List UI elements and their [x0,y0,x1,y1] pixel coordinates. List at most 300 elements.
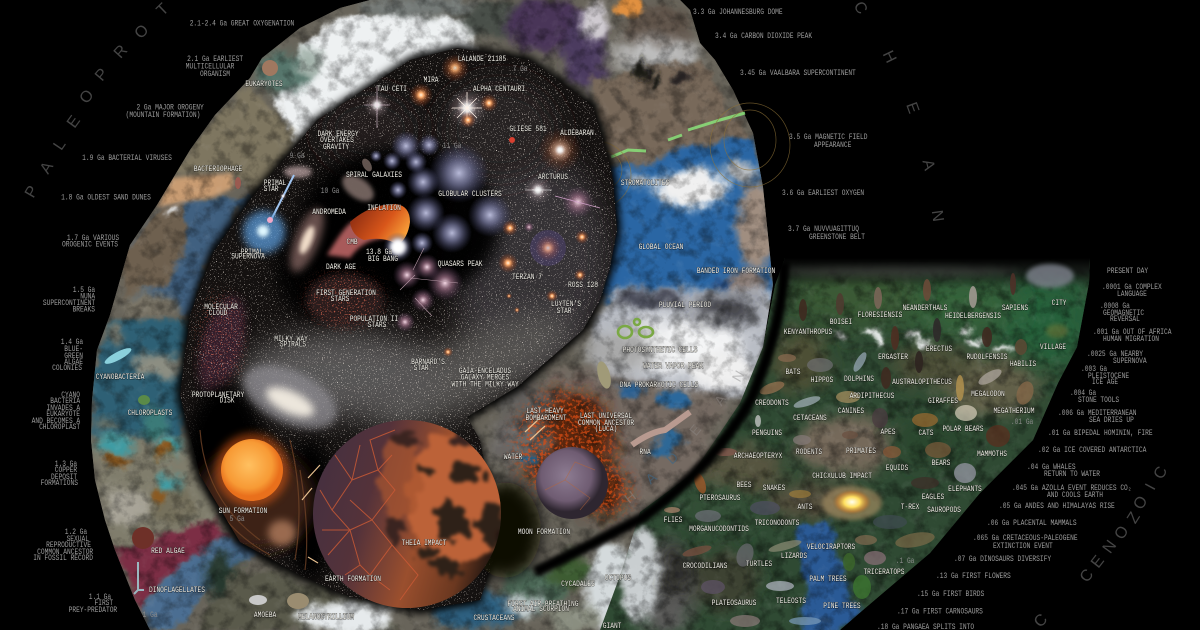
inner labels: species of the fan: TRICERATOPS [863,569,905,577]
inner labels: cosmos: PRIMAL [264,180,286,188]
inner labels: species of the fan: BEARS [932,460,950,468]
inner labels: land band: LAST HEAVY [526,408,564,416]
inner labels: cosmos: CLOUD [209,310,227,318]
era title: Paleoproterozoic: P [22,183,42,201]
inner labels: cosmos: FIRST GENERATION [316,290,376,298]
era title: Archean [850,0,946,223]
inner labels: species of the fan: RUDOLFENSIS [966,354,1008,362]
inner labels: species of the fan: ARCHAEOPTERYX [734,453,783,461]
aurora stripes [611,113,745,157]
brown tidal flats [540,370,730,512]
timeline labels: top right [693,9,867,242]
inner labels: species of the fan: MORGANUCODONTIDS [689,526,749,534]
globular clusters [370,131,512,254]
inner labels: land band: EUKARYOTES [245,81,283,89]
inner labels: cosmos: WITH THE MILKY WAY [451,381,519,390]
first generation stars field [307,274,383,326]
timeline labels: right side: PLEISTOCENE [1088,373,1129,381]
timeline labels: right side: .02 Ga ICE COVERED ANTARCTICA [1038,447,1147,455]
timeline labels: left side: 1.8 Ga OLDEST SAND DUNES [61,194,151,203]
era title: Paleoproterozoic [22,0,173,201]
inner labels: land band: MELANOCYRILLIUM [298,614,354,622]
inner labels: cosmos: QUASARS PEAK [438,261,483,269]
inner labels: species of the fan: BEES [737,482,751,490]
inner labels: cosmos: DARK ENERGY [318,131,359,139]
era title: Cenozoic: C [1077,566,1097,586]
inner labels: land band: CYANOBACTERIA [96,374,145,382]
inner labels: species of the fan: DOLPHINS [844,376,874,384]
black ring against fan [535,262,784,572]
timeline labels: right side: .0008 Ga [1100,303,1130,311]
inner labels: land band: COMMON ANCESTOR [578,420,635,428]
inner labels: species of the fan: TELEOSTS [776,598,806,606]
timeline labels: right side: .001 Ga OUT OF AFRICA [1093,329,1172,337]
inner labels: cosmos: INFLATION [367,205,401,213]
inner labels: cosmos: DARK AGE [326,264,356,272]
inner labels: cosmos: ALPHA CENTAURI [473,86,525,94]
inner labels: species of the fan: PTEROSAURUS [699,495,741,503]
inner labels: land band: 1 Ga [143,612,158,620]
era title: Hadean: H [621,488,639,506]
inner labels: species of the fan: ERGASTER [878,354,909,362]
inner labels: species of the fan: PLATEOSAURUS [712,600,756,608]
timeline labels: left side: 1.4 Ga [61,339,84,347]
timeline labels: left side: CHLOROPLAST [39,424,81,432]
inner labels: species of the fan: PRIMATES [846,448,876,456]
inner labels: species of the fan: HABILIS [1010,361,1036,369]
era title: Cenozoic [1031,464,1171,630]
era title: Cenozoic: C [1151,464,1171,482]
panel: cosmic spiral [170,40,630,620]
timeline labels: right side: .13 Ga FIRST FLOWERS [936,573,1011,581]
timeline labels: left side: REPRODUCTIVE [46,542,91,550]
dinoflagellate icon [134,562,144,594]
timeline labels: left side: GREEN [64,353,83,361]
inner labels: land band: THEIA IMPACT [402,540,447,548]
timeline labels: left side: DEPOSIT [51,474,78,482]
timeline labels: right side: .05 Ga ANDES AND HIMALAYAS RISE [999,503,1115,511]
inner labels: land band: BOMBARDMENT [526,415,567,423]
cyanobacteria icon [103,345,133,367]
timeline labels: left side: EUKARYOTE [46,411,80,419]
timeline labels: right side: STONE TOOLS [1078,397,1119,405]
named stars [364,54,600,357]
timeline labels: top right: 3.3 Ga JOHANNESBURG DOME [693,9,783,17]
timeline labels: left side: 1.5 Ga [73,287,96,295]
timeline labels: left side [32,20,294,615]
era title: Cenozoic: N [1100,537,1120,557]
inner labels: species of the fan: TURTLES [746,561,772,569]
inner labels: species of the fan: LIZARDS [781,553,807,561]
timeline labels: right side: ICE AGE [1092,379,1118,387]
inner labels: species of the fan: ANTS [798,504,812,512]
timeline labels: top right: 3.4 Ga CARBON DIOXIDE PEAK [715,33,813,41]
inner labels: species of the fan: ARDIPITHECUS [850,393,894,401]
inner labels: cosmos: STARS [331,296,349,304]
inner labels: species of the fan: CETACEANS [793,415,827,423]
chloroplast icon [138,395,150,405]
timeline labels: right side: .07 Ga DINOSAURS DIVERSIFY [954,556,1052,564]
inner labels: cosmos: PROTOPLANETARY [192,392,245,400]
timeline labels: left side: MULTICELLULAR [186,63,235,72]
inner labels: land band: WATER VAPOR PEAK [643,363,704,371]
inner labels: species of the fan: CREODONTS [755,400,789,408]
era title: Cenozoic: I [1142,481,1160,493]
inner labels: species of the fan: AUSTRALOPITHECUS [892,379,952,387]
timeline labels: right side: HUMAN MIGRATION [1103,336,1159,344]
inner labels: land band: RNA [639,449,651,457]
timeline labels: left side: AND BECOMES A [32,418,81,426]
inner labels: cosmos: LUYTEN'S [551,301,581,309]
era title: Cenozoic: O [1131,493,1151,513]
inner labels: species of the fan: HIPPOS [811,377,833,385]
inner labels: land band: CYCADALES [561,581,595,589]
inner labels: land band: CHLOROPLASTS [128,410,172,418]
timeline labels: left side: 1.7 Ga VARIOUS [67,235,119,243]
top fog fade [783,258,1090,286]
timeline labels: right side: SEA DRIES UP [1089,417,1134,425]
panel: Phanerozoic fan of life [590,258,1100,630]
inner labels: species of the fan: SNAKES [763,485,785,493]
inner labels: species of the fan: ELEPHANTS [948,486,982,494]
inner labels: species of the fan: PALM TREES [809,576,847,584]
era title: Archean: H [879,48,899,66]
lava speckle [515,391,615,499]
era title: Cenozoic: E [1088,553,1108,571]
inner labels: species of the fan: FLORESIENSIS [858,312,902,320]
global ocean [600,135,775,300]
timeline labels: left side: 2.1-2.4 Ga GREAT OXYGENATION [190,20,294,29]
meteor streaks [302,418,545,563]
pluvial clouds [590,290,775,400]
inner labels: species of the fan: SAUROPODS [927,507,961,515]
inner labels: land band: (LUCA) [595,426,617,434]
hominid figures [799,273,1027,389]
inner labels: species of the fan: EAGLES [922,494,944,502]
timeline labels: left side: INVADES A [47,405,81,413]
timeline labels: right side: LANGUAGE [1117,291,1147,299]
inner labels: cosmos: GLOBULAR CLUSTERS [438,191,502,199]
era title: Paleoproterozoic: R [111,42,131,62]
timeline labels: top right: 3.6 Ga EARLIEST OXYGEN [782,190,864,198]
inner labels: cosmos: STARS [368,322,386,330]
inner labels: cosmos: GRAVITY [323,144,350,152]
timeline labels: left side: 1.2 Ga [65,529,88,537]
Earth formation globe [313,420,541,608]
timeline labels: left side: (MOUNTAIN FORMATION) [126,112,200,120]
timeline labels: right side: EXTINCTION EVENT [993,543,1053,551]
timeline labels: left side: 1.9 Ga BACTERIAL VIRUSES [82,155,172,163]
left lands: mountains [172,85,300,197]
timeline labels: left side: BREAKS [73,306,95,315]
river [793,522,862,630]
inner labels: cosmos: SPIRAL GALAXIES [346,172,402,180]
inner labels: land band [96,81,775,630]
timeline labels: right side: .01 Ga BIPEDAL HOMININ, FIRE [1048,430,1153,438]
inner labels: cosmos: DISK [220,397,235,406]
era title: Hadean: A [711,391,730,408]
inner labels: species of the fan: MAMMOTHS [977,451,1007,459]
red algae icon [132,527,154,549]
inner labels: species of the fan: HEIDELBERGENSIS [945,313,1001,321]
inner labels: species of the fan: .1 Ga [896,558,915,566]
inner labels: land band: GLOBAL OCEAN [639,244,683,252]
snow peaks [832,326,1014,353]
era title: Paleoproterozoic: T [154,0,173,20]
inner labels: species of the fan: MEGALODON [971,391,1005,399]
Milky Way galaxy [234,352,346,442]
timeline labels: top right: 3.5 Ga MAGNETIC FIELD [789,134,867,142]
inner labels: cosmos: 10 Ga [321,188,340,196]
inner labels: cosmos: OVERTAKES [320,137,354,145]
inner labels: land band: DINOFLAGELLATES [149,587,205,595]
inner labels: cosmos: GLIESE 581 [509,126,547,134]
eukaryote icon [262,60,278,76]
timeline labels: right side: .0025 Ga NEARBY [1087,351,1144,359]
timeline labels: left side: BACTERIA [50,398,81,406]
Moon [536,447,608,519]
inner labels: land band: DNA PROKARYOTIC CELLS [620,382,698,390]
inner labels: species of the fan: CHICXULUB IMPACT [812,473,873,481]
era title: Hadean: N [729,368,747,384]
timeline labels: left side: OROGENIC EVENTS [62,241,118,250]
timeline labels: top right: GREENSTONE BELT [809,234,866,242]
inner labels: species of the fan: PINE TREES [823,603,861,611]
timeline labels: left side: ALGAE [64,359,83,367]
inner labels: species of the fan: VELOCIRAPTORS [807,544,855,552]
inner labels: species of the fan: BOISEI [830,319,852,327]
timeline labels: left side: SEXUAL [67,536,89,544]
inner labels: species of the fan: POLAR BEARS [942,426,984,434]
era title: Archean: E [902,100,922,116]
Archean tan land [592,60,750,170]
era title: Paleoproterozoic: O [76,87,98,107]
sun swirl [197,450,313,550]
era title: Paleoproterozoic: L [50,136,70,153]
inner labels: species of the fan: GIRAFFES [928,398,958,406]
inner labels: species of the fan [664,300,1067,611]
inner labels: land band: AMOEBA [254,612,277,620]
algae sea [92,320,190,440]
Chicxulub impact [822,486,882,520]
era title: Archean: A [918,158,938,173]
inner labels: cosmos: 5 Ga [230,516,245,524]
inner labels: species of the fan: VILLAGE [1040,344,1066,352]
inner labels: land band: CRUSTACEANS [473,615,515,623]
timeline labels: left side: COMMON ANCESTOR [37,549,94,557]
inner labels: land band: PLUVIAL PERIOD [659,302,711,310]
inner labels: species of the fan: BATS [786,369,800,377]
inner labels: cosmos: 7 Ga [513,66,528,74]
era title: Paleoproterozoic: P [92,65,112,85]
inner labels: cosmos: ROSS 128 [568,282,598,290]
era title: Cenozoic: O [1111,523,1133,543]
inner labels: land band: EARTH FORMATION [325,576,381,584]
timeline labels: left side: 2.1 Ga EARLIEST [187,56,244,64]
left dark edge [183,385,267,555]
inner labels: species of the fan: T-REX [901,504,920,512]
timeline labels: right side: RETURN TO WATER [1044,471,1101,479]
inner labels: cosmos: ALDEBARAN [560,130,594,138]
timeline labels: right side: GEOMAGNETIC [1103,310,1144,318]
Sun [215,433,289,507]
inner labels: species of the fan: SAPIENS [1002,305,1028,313]
prokaryote icon [595,360,613,390]
inner labels: cosmos: STAR [264,186,279,194]
timeline labels: left side: NUNA [80,293,96,302]
inner labels: cosmos: MIRA [424,77,439,85]
inner labels: species of the fan: CANINES [838,408,864,416]
timeline labels: left side: 1.1 Ga [89,594,112,602]
inner labels: cosmos: SPIRALS [280,341,306,350]
timeline labels: left side: 2 Ga MAJOR OROGENY [136,104,204,113]
era title: Cenozoic: Z [1124,509,1144,527]
inner labels: species of the fan: RODENTS [796,449,822,457]
timeline labels: left side: CYANO [61,392,80,400]
inner labels: species of the fan: KENYANTHROPUS [784,329,832,337]
inner labels: land band: LAST UNIVERSAL [580,413,632,421]
inner labels: species of the fan: APES [881,429,895,437]
inner labels: land band: WATER [504,454,523,462]
timeline labels: right side: .004 Ga [1070,390,1097,398]
inner labels: cosmos: TERZAN 7 [512,274,542,282]
sand dune [157,173,233,207]
inner labels: cosmos: GAIA-ENCELADUS [459,368,511,376]
era title: Hadean: E [686,421,704,439]
timeline labels: right side: .0001 Ga COMPLEX [1102,284,1162,292]
era title: Paleoproterozoic: A [37,159,57,177]
inner labels: cosmos: LALANDE 21185 [458,56,506,64]
timeline labels: left side: BLUE- [64,346,83,354]
era title: Archean: N [928,209,946,223]
inner labels: cosmos: 13.8 Ga [366,249,393,257]
timeline labels: right side: .15 Ga FIRST BIRDS [917,591,984,599]
spiral galaxies [283,157,378,276]
timeline labels: right side: .04 Ga WHALES [1027,464,1076,472]
era title: Hadean [621,368,747,506]
inner labels: land band: BANDED IRON FORMATION [697,268,775,276]
inner labels: cosmos: MOLECULAR [204,304,239,312]
molecular cloud [196,295,248,392]
primal star and supernova [243,166,312,253]
timeline labels: left side: ORGANISM [200,71,230,79]
red algae [113,517,228,610]
timeline labels: right side: .065 Ga CRETACEOUS-PALEOGENE [973,535,1078,543]
inner labels: cosmos: GALAXY MERGES [461,374,509,383]
quasars and population II [393,248,463,332]
inner labels: cosmos: BIG BANG [368,256,398,264]
inner labels: species of the fan: PENGUINS [752,430,782,438]
timeline labels: left side: IN FOSSIL RECORD [33,555,93,563]
timeline labels: left side: 1.3 Ga [55,461,78,469]
amoeba icons [249,593,309,609]
inner labels: cosmos: SUN FORMATION [219,508,267,516]
inner labels: species of the fan: MEGATHERIUM [993,408,1035,416]
inner labels: cosmos: SUPERNOVA [231,253,266,262]
city [1026,264,1074,288]
inner labels: species of the fan: EQUIDS [886,465,908,473]
timeline labels: left side: SUPERCONTINENT [43,300,96,308]
inner labels: species of the fan: CROCODILIANS [683,563,727,571]
timeline labels: left side: PREY-PREDATOR [69,607,118,615]
inner labels: cosmos: PRIMAL [241,249,263,257]
village [1046,324,1068,338]
inner labels: cosmos: 11 Ga [443,143,462,151]
inner labels: cosmos: ANDROMEDA [312,209,347,217]
inner labels: cosmos: MILKY WAY [274,336,309,344]
copper deposits [92,438,225,550]
inner labels: land band: PHOTOSYNTHETIC CELLS [623,347,697,355]
inner labels: cosmos: STAR [557,308,572,316]
inner labels: land band: STROMATOLITES [621,180,669,188]
inner labels: species of the fan: ERECTUS [926,346,952,354]
volcano and clouds [624,4,692,42]
timeline labels: left side: FIRST [94,600,114,608]
top snow fields [275,10,480,145]
lava base of late heavy bombardment [515,390,615,490]
timeline labels: right side: .006 Ga MEDITERRANEAN [1058,410,1136,418]
magnetic field lines [559,103,790,209]
timeline labels: right side: .045 Ga AZOLLA EVENT REDUCES CO₂ [1012,485,1132,493]
inner labels: cosmos: BARNARD'S [411,359,445,367]
black core [300,147,500,303]
animals [664,350,1037,627]
inner labels: cosmos: ARCTURUS [538,174,568,182]
inner labels: land band: BACTERIOPHAGE [194,166,242,174]
inner labels: land band: RED ALGAE [151,548,185,556]
timeline labels: left side: COPPER [55,467,78,475]
timeline labels: right side: .06 Ga PLACENTAL MAMMALS [987,520,1077,528]
inner labels: species of the fan: TRICONODONTS [755,520,799,528]
timeline labels: top right: 3.45 Ga VAALBARA SUPERCONTINENT [740,70,856,78]
inner labels: species of the fan: CITY [1052,300,1067,308]
CMB and inflation [327,204,413,262]
inner labels: land band: OCTOPUS [605,575,631,583]
era title: Paleoproterozoic: O [132,22,152,42]
timeline labels: right side: .003 Ga [1081,366,1108,374]
inner labels: species of the fan: FLIES [664,517,682,525]
inner labels: species of the fan: NEANDERTHALS [903,305,947,313]
inner labels: cosmos: CMB [346,239,358,247]
timeline labels: right side: PRESENT DAY [1107,268,1149,276]
inner labels: land band: MOON FORMATION [518,529,570,537]
inner labels: species of the fan: .01 Ga [1011,419,1034,427]
timeline labels: left side: FORMATIONS [41,480,78,488]
timeline labels: top right: APPEARANCE [814,142,851,150]
timeline labels: right side: SUPERNOVA [1113,358,1147,366]
photosynthetic cells icon [618,319,653,338]
era title: Paleoproterozoic: E [64,113,84,131]
bottom land [195,570,400,630]
DNA strand [632,412,690,445]
timeline labels: right side: REVERSAL [1110,316,1140,324]
panel: Proterozoic and Archean land band [91,0,773,630]
era title: Hadean: D [663,449,681,467]
timeline labels: right side: .17 Ga FIRST CARNOSAURS [897,608,983,617]
inner labels: cosmos: POPULATION II [350,316,398,324]
bacteriophage icon [235,177,241,189]
era title: Hadean: A [642,468,660,487]
timeline labels: right side: AND COOLS EARTH [1047,492,1103,500]
timeline labels: right side [877,268,1172,630]
timeline labels: left side: COLONIES [52,365,82,373]
inner labels: land band: FIRST AIR-BREATHING [508,601,578,609]
inner labels: cosmos: 9 Ga [290,153,305,161]
inner labels: species of the fan: CATS [919,430,933,438]
inner labels: land band: ANIMAL SCORPION [513,606,569,614]
timeline labels: top right: 3.7 Ga NUVVUAGITTUQ [788,226,859,234]
inner labels: cosmos: STAR [414,365,429,373]
